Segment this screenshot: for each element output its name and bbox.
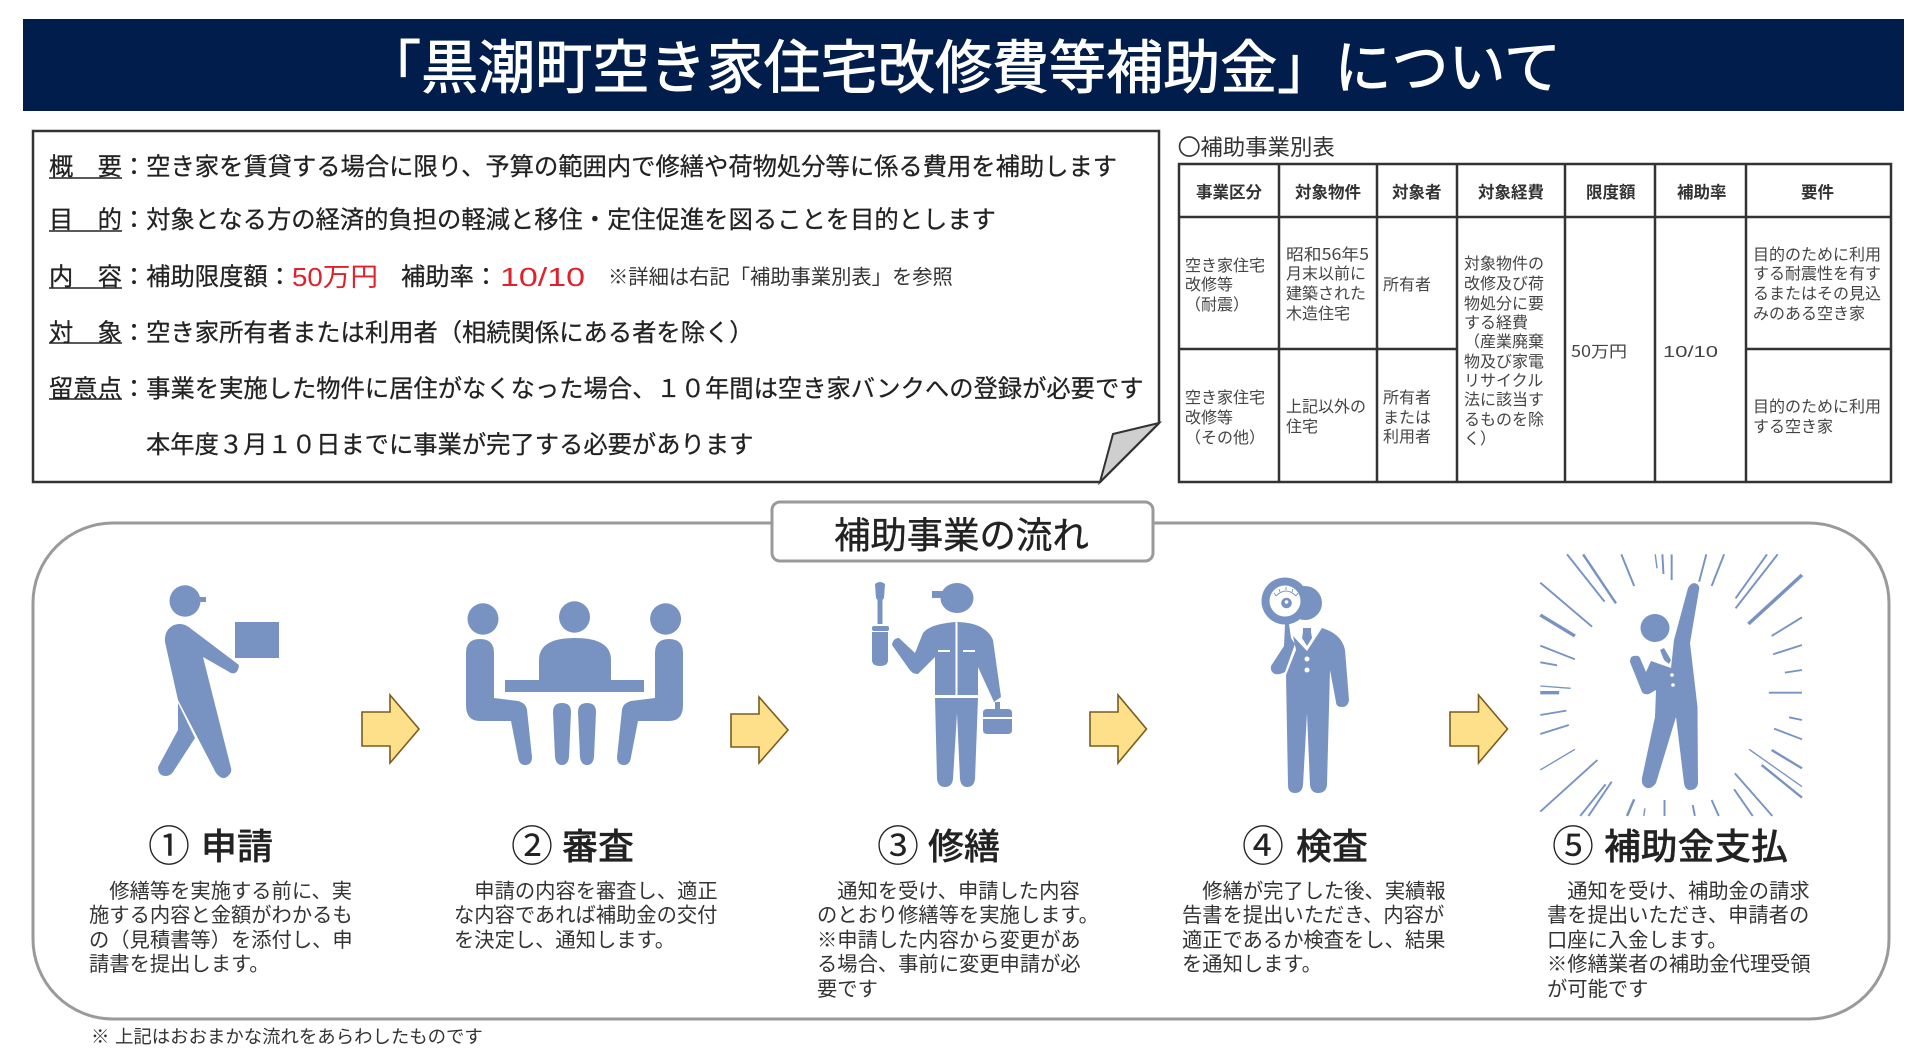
table column: recipient: 所有者: [1383, 384, 1431, 408]
table column: eligible costs: 物及び家電: [1464, 348, 1544, 372]
table column: requirements: [1753, 241, 1881, 437]
icon: meeting around table: [466, 601, 683, 765]
step 1: application: の（見積書等）を添付し、申: [89, 923, 353, 953]
table column: requirements: るまたはその見込: [1753, 280, 1881, 304]
step 1: application: 修繕等を実施する前に、実: [89, 874, 352, 904]
step 5: subsidy payment: 口座に入金します。: [1547, 923, 1728, 953]
heading: subsidy table: ○補助事業別表: [1178, 130, 1335, 162]
step 4: inspection: 検査: [1296, 818, 1368, 870]
panel: subsidy flow: [33, 502, 1889, 1019]
table column: category: [1185, 252, 1265, 448]
icon: folded page corner: [1100, 423, 1159, 482]
step 5: subsidy payment: 補助金支払: [1604, 818, 1788, 870]
step 5: subsidy payment: [1547, 813, 1811, 1002]
heading: flow title box: 補助事業の流れ: [834, 507, 1089, 559]
table column: category: （耐震）: [1185, 291, 1249, 315]
table column: category: 空き家住宅: [1185, 384, 1265, 408]
step 2: review: 審査: [562, 818, 634, 870]
table column: eligible costs: るものを除: [1464, 406, 1544, 430]
text: content with amounts: [49, 257, 953, 292]
step 2: review: な内容であれば補助金の交付: [454, 898, 717, 928]
table column: eligible costs: 改修及び荷: [1464, 270, 1544, 294]
table column: property: [1286, 241, 1369, 437]
step 1: application: 申請: [201, 818, 273, 870]
table header row: 対象者: [1392, 179, 1442, 203]
table column: recipient: [1383, 271, 1431, 447]
table header row: 限度額: [1586, 179, 1636, 203]
table column: property: 建築された: [1286, 280, 1366, 304]
step 2: review: [454, 813, 718, 953]
step 1: application: 請書を提出します。: [89, 947, 270, 977]
table column: category: （その他）: [1185, 424, 1265, 448]
table header row: 対象物件: [1295, 179, 1361, 203]
icon: inspector with magnifier: [1262, 578, 1349, 793]
text: content with amounts: 10/10: [500, 262, 585, 292]
step 4: inspection: 修繕が完了した後、実績報: [1182, 874, 1446, 904]
step 4: inspection: 適正であるか検査をし、結果: [1182, 923, 1445, 953]
icon: person carrying box: [158, 585, 279, 778]
step 2: review: を決定し、通知します。: [454, 923, 675, 953]
step 3: repair: 通知を受け、申請した内容: [817, 874, 1080, 904]
table header row: [1196, 179, 1834, 203]
table column: property: 上記以外の: [1286, 393, 1366, 417]
table column: requirements: 目的のために利用: [1753, 393, 1881, 417]
text: notes: 本年度３月１０日までに事業が完了する必要があります: [146, 425, 753, 460]
table column: requirements: みのある空き家: [1753, 300, 1865, 324]
text: content with amounts: ※詳細は右記「補助事業別表」を参照: [608, 260, 953, 290]
step 4: inspection: [1182, 813, 1446, 977]
table column: eligible costs: く）: [1464, 425, 1496, 449]
step 5: subsidy payment: ⑤: [1552, 813, 1594, 874]
table header row: 補助率: [1677, 179, 1726, 203]
step 5: subsidy payment: 書を提出いただき、申請者の: [1547, 898, 1809, 928]
table column: eligible costs: リサイクル: [1464, 367, 1543, 391]
text: notes: [49, 369, 1144, 460]
table column: eligible costs: 物処分に要: [1464, 290, 1544, 314]
title banner: [23, 19, 1904, 111]
text: purpose: 目 的：対象となる方の経済的負担の軽減と移住・定住促進を図ることを目的とします: [49, 200, 996, 235]
step 1: application: 施する内容と金額がわかるも: [89, 898, 353, 928]
table: subsidy programs: [1179, 164, 1891, 482]
table column: recipient: 利用者: [1383, 423, 1431, 447]
step 3: repair: ③: [877, 813, 919, 874]
step 3: repair: のとおり修繕等を実施します。: [817, 898, 1099, 928]
footnote: ※: [91, 1023, 109, 1049]
table column: category: 改修等: [1185, 404, 1233, 428]
table column: recipient: または: [1383, 404, 1431, 428]
step 4: inspection: ④: [1242, 813, 1284, 874]
arrow: step 2 to 3: [731, 697, 788, 763]
heading: flow title box: [772, 502, 1153, 561]
table header row: 事業区分: [1196, 179, 1262, 203]
table column: eligible costs: 法に該当す: [1464, 386, 1544, 410]
step 1: application: [89, 813, 353, 977]
table column: recipient: 所有者: [1383, 271, 1431, 295]
step 3: repair: 修繕: [928, 818, 1000, 870]
arrow: step 4 to 5: [1450, 695, 1508, 763]
step 3: repair: 要です: [817, 972, 878, 1002]
table column: category: 改修等: [1185, 271, 1233, 295]
text: content with amounts: 50万円: [292, 262, 378, 292]
table column: property: 木造住宅: [1286, 300, 1350, 324]
table header row: 対象経費: [1478, 179, 1544, 203]
table column: category: 空き家住宅: [1185, 252, 1265, 276]
text: target: 対 象：空き家所有者または利用者（相続関係にある者を除く）: [49, 313, 754, 348]
step 2: review: 申請の内容を審査し、適正: [454, 874, 718, 904]
step 5: subsidy payment: 通知を受け、補助金の請求: [1547, 874, 1810, 904]
table column: requirements: 目的のために利用: [1753, 241, 1881, 265]
table column: eligible costs: する経費: [1464, 309, 1528, 333]
step 5: subsidy payment: ※修繕業者の補助金代理受領: [1547, 947, 1811, 977]
panel: overview with folded corner: [33, 131, 1159, 482]
arrow: step 1 to 2: [362, 695, 419, 763]
step 3: repair: る場合、事前に変更申請が必: [817, 947, 1081, 977]
step 2: review: ②: [511, 813, 553, 874]
text: content with amounts: 補助率：: [401, 257, 498, 292]
table column: eligible costs: [1464, 250, 1544, 449]
table column: property: 住宅: [1286, 413, 1318, 437]
icon: worker with screwdriver and toolbox: [872, 582, 1012, 787]
footnote: 上記はおおまかな流れをあらわしたものです: [115, 1023, 483, 1049]
step 5: subsidy payment: が可能です: [1547, 972, 1648, 1002]
table column: property: 月末以前に: [1286, 260, 1366, 284]
table column: limit and rate: 10/10: [1663, 344, 1718, 361]
table column: eligible costs: 対象物件の: [1464, 250, 1544, 274]
table column: limit and rate: [1571, 338, 1718, 362]
step 4: inspection: 告書を提出いただき、内容が: [1182, 898, 1444, 928]
table column: requirements: する空き家: [1753, 413, 1833, 437]
step 1: application: ①: [148, 813, 190, 874]
table column: property: 昭和56年5: [1286, 241, 1369, 265]
text: notes: 留意点：事業を実施した物件に居住がなくなった場合、１０年間は空き家バンクへの登録が必要です: [49, 369, 1144, 404]
step 3: repair: [817, 813, 1099, 1002]
arrow: step 3 to 4: [1090, 695, 1146, 763]
table header row: 要件: [1801, 179, 1834, 203]
table column: requirements: する耐震性を有す: [1753, 260, 1881, 284]
table column: eligible costs: （産業廃棄: [1464, 328, 1544, 352]
table column: limit and rate: 50万円: [1571, 338, 1627, 362]
step 4: inspection: を通知します。: [1182, 947, 1322, 977]
step 3: repair: ※申請した内容から変更があ: [817, 923, 1081, 953]
text: summary: 概 要：空き家を賃貸する場合に限り、予算の範囲内で修繕や荷物処分等に係る費用を補助します: [49, 147, 1117, 182]
title banner: 「黒潮町空き家住宅改修費等補助金」について: [364, 21, 1561, 105]
text: content with amounts: 内 容：補助限度額：: [49, 257, 292, 292]
icon: person celebrating with rays: [1540, 554, 1802, 816]
